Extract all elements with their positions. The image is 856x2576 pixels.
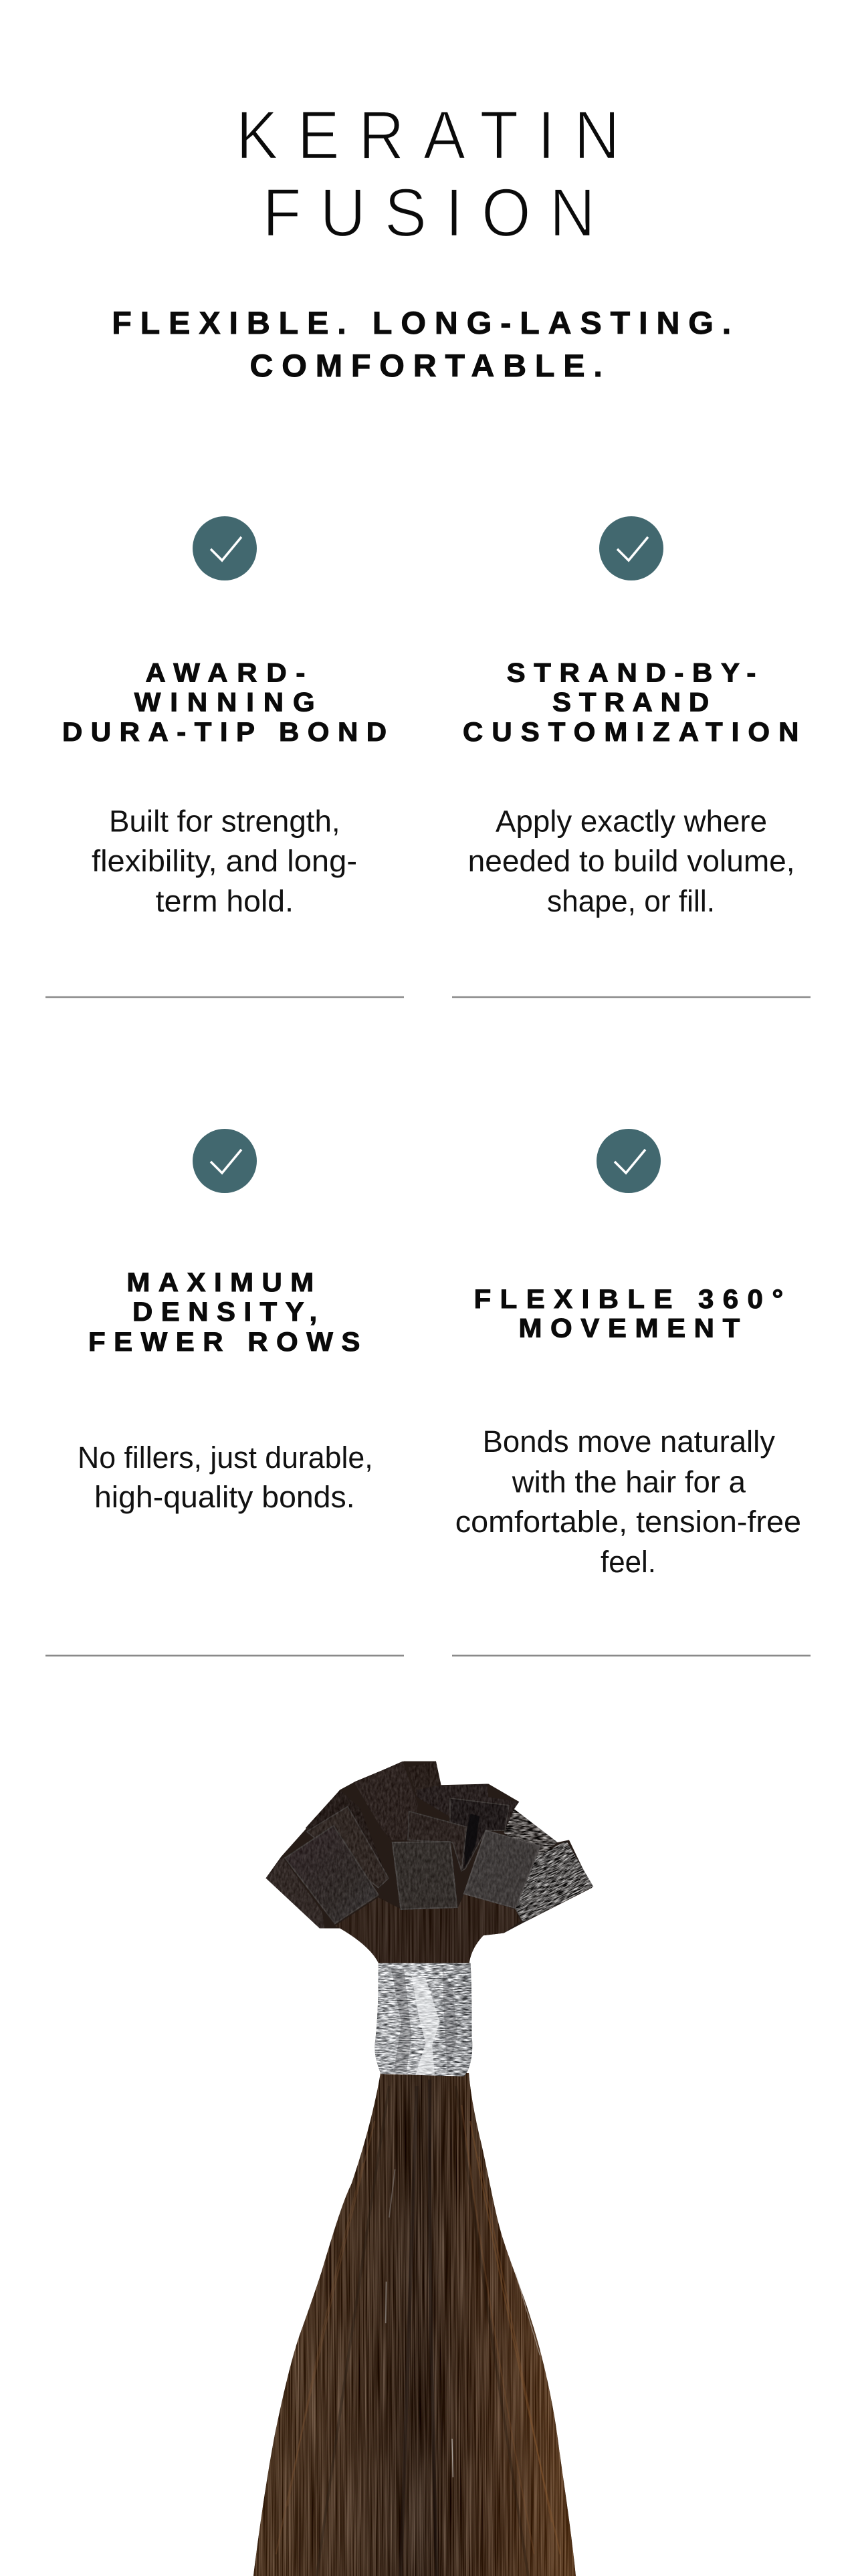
heading: award-winning dura-tip bond: DURA-TIP BOND [62, 717, 387, 747]
icon: check badge [599, 516, 663, 580]
subtitle [112, 306, 731, 384]
text: customization description: Apply exactly where [496, 804, 767, 839]
panel: flexible 360 movement [452, 1129, 811, 1656]
heading: flexible 360 movement [474, 1284, 783, 1343]
heading: strand-by-strand customization: CUSTOMIZATION [463, 717, 798, 747]
text: award-winning description: flexibility, and long- [92, 844, 357, 878]
heading: maximum density, fewer rows: DENSITY, [132, 1297, 317, 1327]
text: movement description: feel. [601, 1545, 656, 1579]
heading: maximum density, fewer rows: FEWER ROWS [88, 1327, 360, 1357]
icon: check badge [193, 1129, 257, 1193]
text: density description: No fillers, just durable, [78, 1440, 373, 1475]
text: customization description [468, 804, 795, 918]
heading: strand-by-strand customization: STRAND [552, 687, 709, 717]
silver thread wrap [374, 1963, 472, 2076]
text: customization description: needed to build volume, [468, 844, 795, 878]
text: density description [78, 1440, 373, 1514]
keratin bond tips [265, 1761, 593, 1963]
text: customization description: shape, or fill. [547, 884, 715, 918]
panel: strand-by-strand customization [452, 516, 811, 997]
subtitle: COMFORTABLE. [250, 349, 603, 384]
heading: award-winning dura-tip bond: AWARD- [146, 657, 305, 687]
heading: strand-by-strand customization [463, 657, 798, 747]
heading: award-winning dura-tip bond: WINNING [134, 687, 315, 717]
text: movement description: comfortable, tension-free [455, 1505, 801, 1539]
panel: maximum density, fewer rows [45, 1129, 404, 1656]
icon: check badge [193, 516, 257, 580]
title [236, 97, 620, 251]
heading: flexible 360 movement: FLEXIBLE 360° [474, 1284, 783, 1314]
text: award-winning description [92, 804, 357, 918]
subtitle: FLEXIBLE. LONG-LASTING. [112, 306, 731, 341]
heading: strand-by-strand customization: STRAND-BY- [507, 657, 756, 687]
product image: keratin fusion hair extension [253, 1761, 593, 2576]
heading: flexible 360 movement: MOVEMENT [519, 1313, 740, 1343]
heading: award-winning dura-tip bond [62, 657, 387, 747]
title: KERATIN [236, 97, 620, 173]
heading: maximum density, fewer rows: MAXIMUM [126, 1267, 314, 1297]
title: FUSION [263, 175, 595, 251]
text: density description: high-quality bonds. [94, 1480, 355, 1514]
icon: check badge [597, 1129, 661, 1193]
hair strand body [253, 2073, 576, 2576]
text: movement description: with the hair for a [512, 1465, 746, 1499]
text: movement description [455, 1424, 801, 1579]
heading: maximum density, fewer rows [88, 1267, 360, 1357]
text: award-winning description: term hold. [156, 884, 294, 918]
panel: award-winning dura-tip bond [45, 516, 404, 997]
text: movement description: Bonds move naturally [483, 1424, 775, 1459]
text: award-winning description: Built for strength, [109, 804, 340, 839]
